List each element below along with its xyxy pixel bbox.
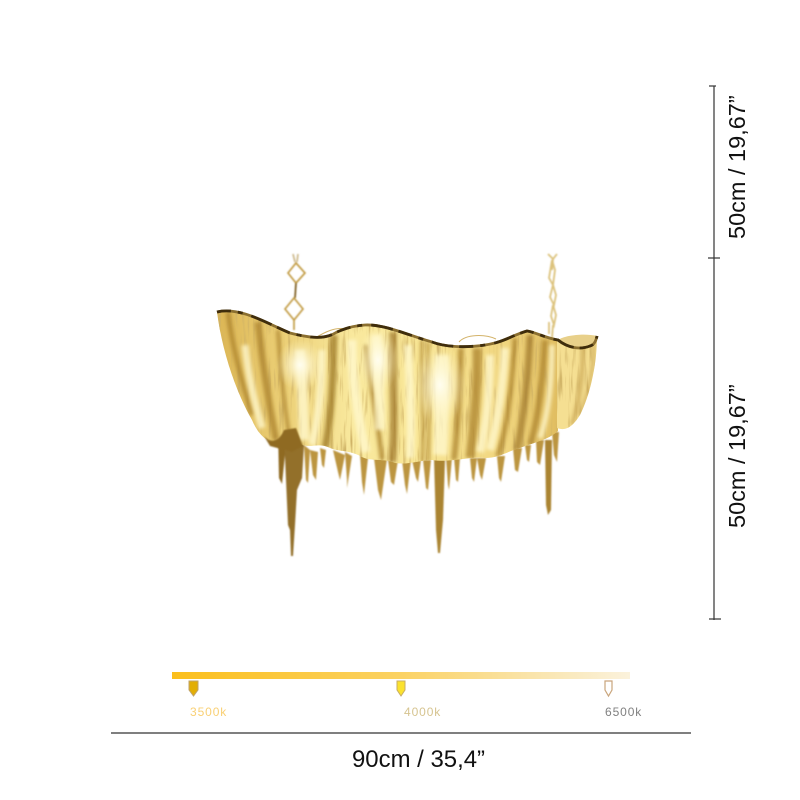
fine chain streak texture [218,313,552,464]
width dimension line [111,732,691,734]
inner support wires [315,329,496,342]
width label: 90cm / 35,4” [352,746,485,773]
dark top rim [217,311,597,348]
chain mesh drape [215,305,560,470]
height dimension axis [708,86,721,620]
gradient bar [172,672,630,679]
right end drape [557,334,597,430]
label 6500k: 6500k [605,705,642,719]
colour temperature scale [172,672,642,719]
light bands [245,335,552,458]
marker 6500k [605,681,612,696]
gathered hem [264,428,303,452]
upper height label: 50cm / 19,67” [724,95,750,239]
infographic canvas [111,85,748,770]
left hanging chain [285,254,305,330]
hanging fringe [278,432,559,556]
glow areas [278,329,464,418]
chandelier product image [215,254,600,556]
right hanging chain [548,254,557,338]
lower height label: 50cm / 19,67” [724,384,750,528]
marker 3500k [189,681,198,696]
marker 4000k [397,681,405,696]
folds [228,312,545,462]
label 4000k: 4000k [404,705,441,719]
label 3500k: 3500k [190,705,227,719]
